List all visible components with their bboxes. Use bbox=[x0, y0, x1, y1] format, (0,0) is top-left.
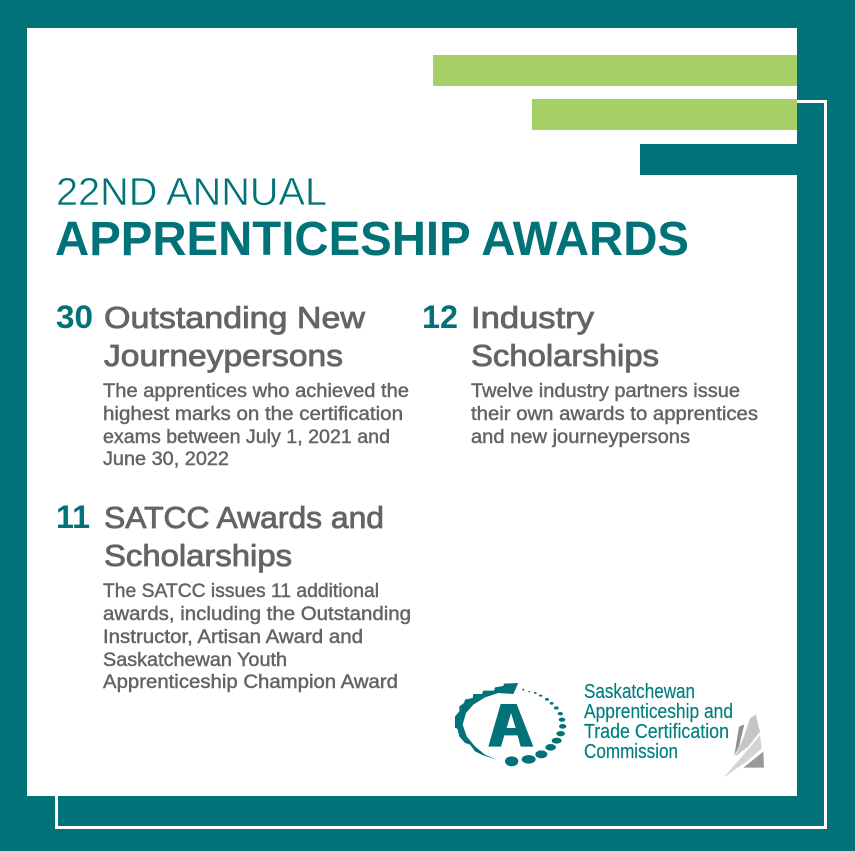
award block: 11 SATCC awards and scholarships bbox=[56, 499, 411, 693]
award block: 30 outstanding new journeypersons: highest marks on the certification bbox=[103, 404, 403, 425]
award block: 12 industry scholarships: their own awards to apprentices bbox=[471, 404, 758, 425]
award block: 11 SATCC awards and scholarships: Scholarships bbox=[104, 538, 292, 573]
award block: 12 industry scholarships: 12 bbox=[422, 299, 458, 335]
title: APPRENTICESHIP AWARDS bbox=[55, 213, 689, 266]
award block: 30 outstanding new journeypersons: June 30, 2022 bbox=[103, 449, 229, 470]
icon: ring with letter A bbox=[455, 683, 566, 766]
award block: 12 industry scholarships: Twelve industry partners issue bbox=[471, 381, 740, 402]
award block: 11 SATCC awards and scholarships: awards, including the Outstanding bbox=[103, 604, 411, 625]
decorative bars bbox=[433, 55, 797, 175]
logo wordmark: Apprenticeship and bbox=[584, 701, 733, 723]
award block: 30 outstanding new journeypersons: Journeypersons bbox=[104, 338, 343, 373]
title: 22ND ANNUAL bbox=[56, 171, 327, 214]
award block: 30 outstanding new journeypersons: exams between July 1, 2021 and bbox=[103, 427, 390, 448]
logo: SATCC bbox=[455, 681, 764, 778]
award block: 30 outstanding new journeypersons: The apprentices who achieved the bbox=[103, 381, 409, 402]
award block: 11 SATCC awards and scholarships: 11 bbox=[56, 499, 90, 535]
award block: 12 industry scholarships: Industry bbox=[471, 300, 595, 335]
award block: 11 SATCC awards and scholarships: The SATCC issues 11 additional bbox=[103, 581, 379, 602]
award block: 30 outstanding new journeypersons bbox=[56, 299, 409, 470]
award block: 11 SATCC awards and scholarships: SATCC Awards and bbox=[104, 500, 384, 535]
award block: 12 industry scholarships: Scholarships bbox=[471, 338, 659, 373]
logo wordmark bbox=[584, 681, 733, 763]
award block: 30 outstanding new journeypersons: 30 bbox=[56, 299, 93, 335]
award block: 11 SATCC awards and scholarships: Instructor, Artisan Award and bbox=[103, 627, 363, 648]
icon: grey sail bbox=[723, 714, 764, 778]
logo wordmark: Commission bbox=[584, 741, 678, 763]
award block: 12 industry scholarships bbox=[422, 299, 758, 448]
white outline frame bbox=[56, 102, 826, 828]
logo wordmark: Saskatchewan bbox=[584, 681, 695, 703]
award block: 30 outstanding new journeypersons: Outstanding New bbox=[104, 300, 366, 335]
award block: 11 SATCC awards and scholarships: Saskatchewan Youth bbox=[103, 650, 287, 671]
award block: 12 industry scholarships: and new journeypersons bbox=[471, 427, 690, 448]
logo wordmark: Trade Certification bbox=[584, 721, 729, 743]
title bbox=[55, 171, 689, 266]
award block: 11 SATCC awards and scholarships: Apprenticeship Champion Award bbox=[103, 672, 398, 693]
